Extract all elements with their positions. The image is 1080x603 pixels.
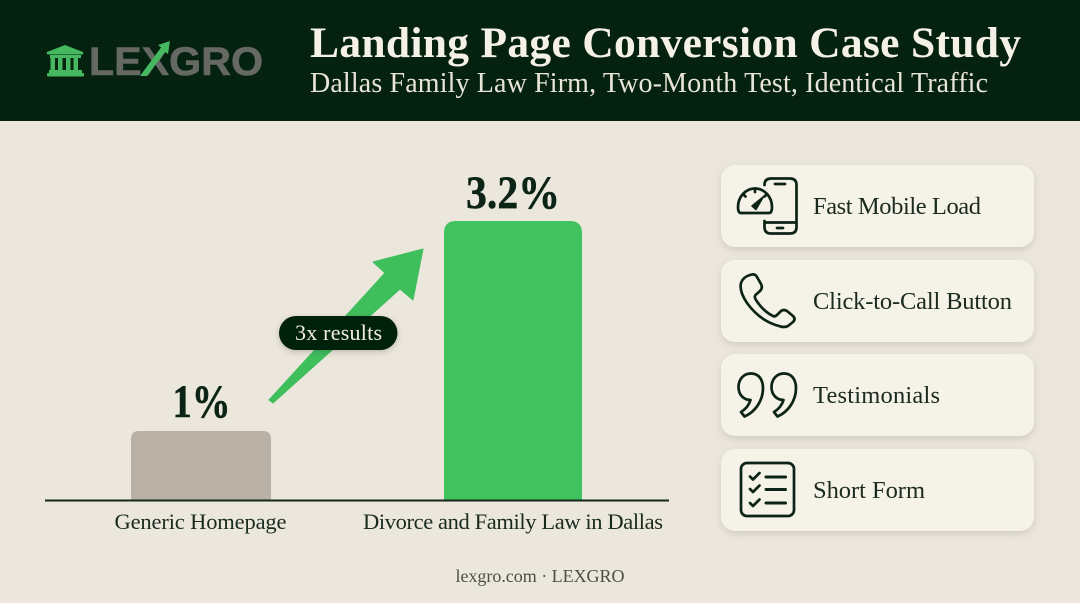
value: 3.2%: 3.2% [466, 167, 560, 219]
logo wordmark: LEXGRO [89, 40, 263, 84]
bar: divorce and family law [444, 221, 582, 500]
icon: gauge and phone [738, 178, 796, 234]
panel: click-to-call [721, 260, 1034, 342]
label: Click-to-Call Button [813, 288, 1012, 315]
panel: fast mobile load [721, 165, 1034, 247]
icon: quotation marks [738, 374, 796, 416]
bar: generic homepage [131, 431, 271, 500]
icon: courthouse [47, 45, 84, 76]
logo arrow [140, 41, 170, 76]
value: 1%: 1% [172, 376, 230, 428]
footer: lexgro.com · LEXGRO [456, 566, 624, 586]
label: generic homepage: Generic Homepage [114, 509, 286, 534]
label: Short Form [813, 477, 925, 504]
logo [47, 40, 263, 84]
pill: 3x results [279, 316, 398, 350]
title: Landing Page Conversion Case Study [310, 19, 1021, 67]
baseline [45, 500, 669, 502]
header band [0, 0, 1080, 121]
label: Testimonials [813, 382, 940, 409]
bar chart [45, 167, 669, 534]
icon: checklist [741, 463, 794, 516]
panel: short form [721, 449, 1034, 531]
arrow: growth [269, 249, 423, 403]
icon: phone handset [741, 274, 794, 327]
pill: 3x results: 3x results [295, 320, 382, 345]
label: divorce and family law: Divorce and Family Law in Dallas [363, 509, 663, 534]
label: Fast Mobile Load [813, 193, 981, 220]
panel: testimonials [721, 354, 1034, 436]
subtitle: Dallas Family Law Firm, Two-Month Test, Identical Traffic [310, 68, 988, 99]
